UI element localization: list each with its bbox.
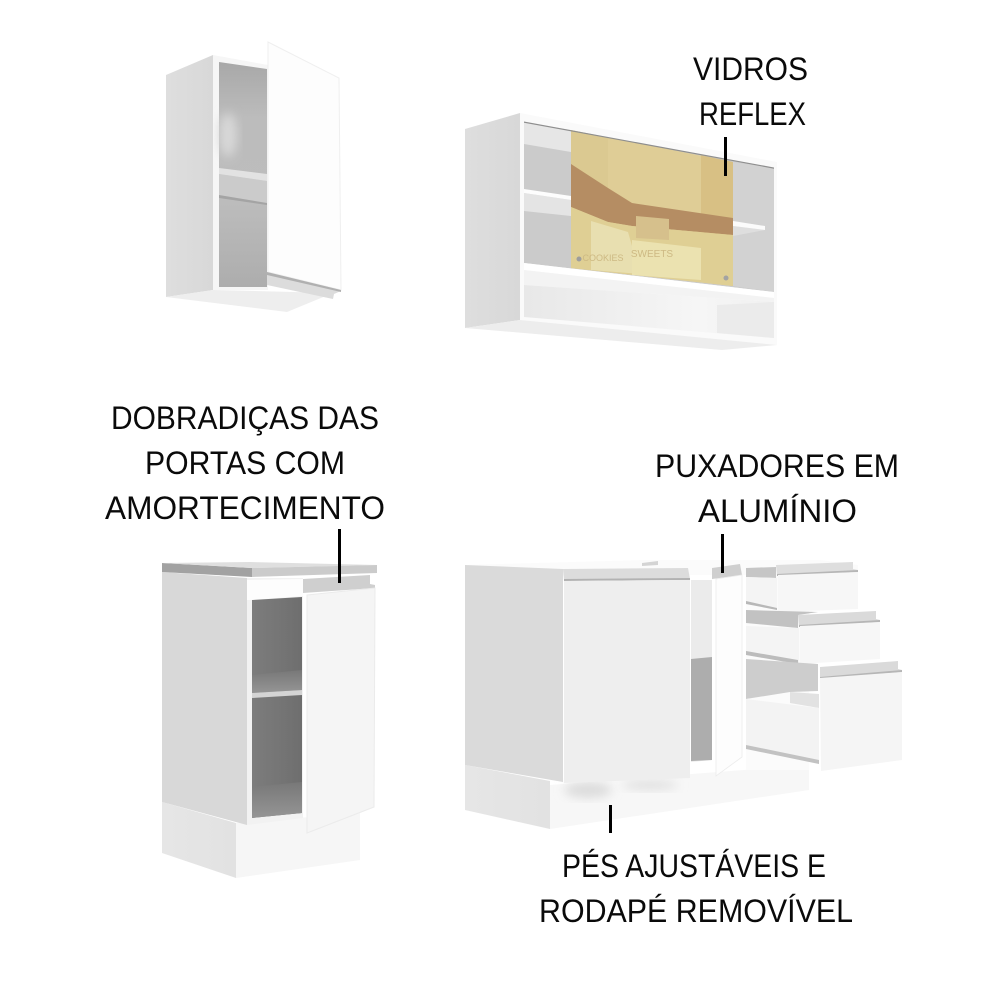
label: vidros reflex (693, 51, 808, 176)
right panel tint (701, 155, 733, 286)
plinth shadow left (564, 782, 612, 798)
countertop side (162, 563, 252, 577)
drawer 1 (746, 562, 858, 612)
glass base tint (571, 130, 733, 286)
brown reflection band (571, 164, 733, 235)
door (268, 42, 341, 290)
left shelf (524, 189, 571, 200)
side (746, 626, 799, 663)
front frame (520, 113, 777, 345)
text line 3: AMORTECIMENTO (105, 490, 385, 526)
door handle (267, 273, 341, 299)
left door (564, 580, 690, 783)
pale reflected cabinets (591, 221, 640, 274)
label: puxadores (655, 448, 899, 573)
side (746, 699, 819, 762)
front (800, 622, 880, 664)
countertop top (162, 562, 377, 568)
left shelf underside (524, 193, 571, 216)
lower yellow reflection (571, 207, 733, 286)
pointer line (609, 805, 612, 833)
cabinet side panel (166, 55, 213, 297)
right shelf (733, 221, 765, 230)
shelf underside (219, 174, 267, 204)
text line 1: DOBRADIÇAS DAS (111, 400, 379, 436)
back wall (746, 659, 818, 699)
left door handle line (564, 578, 690, 581)
reflected text left: COOKIES (582, 253, 624, 263)
carcass front behind drawers (746, 566, 809, 770)
top slot (642, 561, 658, 566)
bottom panel (465, 320, 777, 350)
rail (746, 745, 819, 764)
shelf (252, 690, 302, 698)
plinth front (550, 765, 809, 829)
drawer 3 (746, 659, 902, 771)
text line 1: PÉS AJUSTÁVEIS E (562, 848, 826, 884)
handle line (799, 620, 880, 627)
handle (776, 562, 858, 576)
interior (252, 597, 302, 818)
open door (716, 575, 742, 776)
side panel (162, 572, 247, 825)
interior light spot (219, 113, 237, 157)
interior shelf (219, 168, 267, 181)
pointer line (721, 534, 724, 573)
label: dobradiças (105, 400, 385, 583)
pale reflected jar (632, 240, 701, 280)
shelf shadow line (219, 195, 267, 205)
countertop front (252, 565, 377, 577)
plinth side (465, 765, 550, 829)
rail (746, 601, 777, 610)
front (778, 572, 858, 612)
text line 1: PUXADORES EM (655, 448, 899, 484)
left glass knob (576, 256, 582, 262)
reflected jar lid (636, 216, 669, 240)
right opening (733, 162, 774, 292)
front (820, 672, 902, 771)
interior floor (252, 782, 302, 818)
top rail (524, 122, 774, 169)
niche right wall (717, 302, 774, 338)
text line 2: RODAPÉ REMOVÍVEL (539, 893, 853, 929)
pointer line (338, 529, 341, 583)
door (307, 588, 375, 833)
handle line (777, 570, 858, 576)
right shelf underside (733, 226, 765, 236)
rail (746, 651, 798, 664)
text line 2: ALUMÍNIO (698, 493, 857, 529)
base cabinet with countertop (162, 562, 377, 878)
front frame (247, 578, 303, 825)
handle (798, 611, 880, 627)
lower interior dark (691, 657, 712, 761)
inner top (746, 695, 819, 708)
plinth front (236, 813, 360, 878)
divider edge (524, 270, 774, 302)
sliding glass doors (571, 130, 733, 286)
side (746, 577, 777, 610)
cabinet interior (219, 62, 267, 287)
side panel (465, 113, 520, 328)
rear shadow (746, 567, 776, 578)
open niche (524, 285, 774, 338)
plinth side (162, 802, 236, 878)
text: reflex: REFLEX (699, 96, 806, 132)
dark recess (746, 610, 818, 628)
door handle (303, 575, 375, 593)
interior mid floor (252, 670, 302, 693)
side panel (465, 565, 563, 782)
left panel tint (571, 130, 608, 272)
central interior (691, 580, 712, 762)
left door handle (563, 568, 690, 581)
drawer 2 (746, 610, 880, 664)
plinth shadow right (622, 780, 678, 790)
text line 2: PORTAS COM (145, 445, 345, 481)
wall cabinet with open door (166, 42, 341, 312)
cabinet bottom panel (166, 290, 333, 312)
handle (820, 661, 902, 679)
pointer line (724, 137, 727, 176)
right glass knob (724, 276, 728, 280)
label: pés ajustáveis (539, 805, 853, 929)
handle line (820, 670, 902, 679)
left upper recess (524, 122, 571, 152)
glass wall cabinet (465, 113, 777, 350)
top surface (465, 560, 858, 575)
open door handle (712, 564, 742, 579)
text: vidros: VIDROS (693, 51, 808, 87)
top rail (247, 579, 303, 600)
upper opening (524, 122, 774, 292)
door handle dark line (267, 272, 341, 292)
divider shelf (524, 263, 774, 298)
cabinet front frame (213, 55, 268, 290)
large base cabinet with doors and drawers (465, 560, 902, 829)
reflected text: SWEETS (631, 249, 673, 260)
inner partition (790, 692, 819, 708)
